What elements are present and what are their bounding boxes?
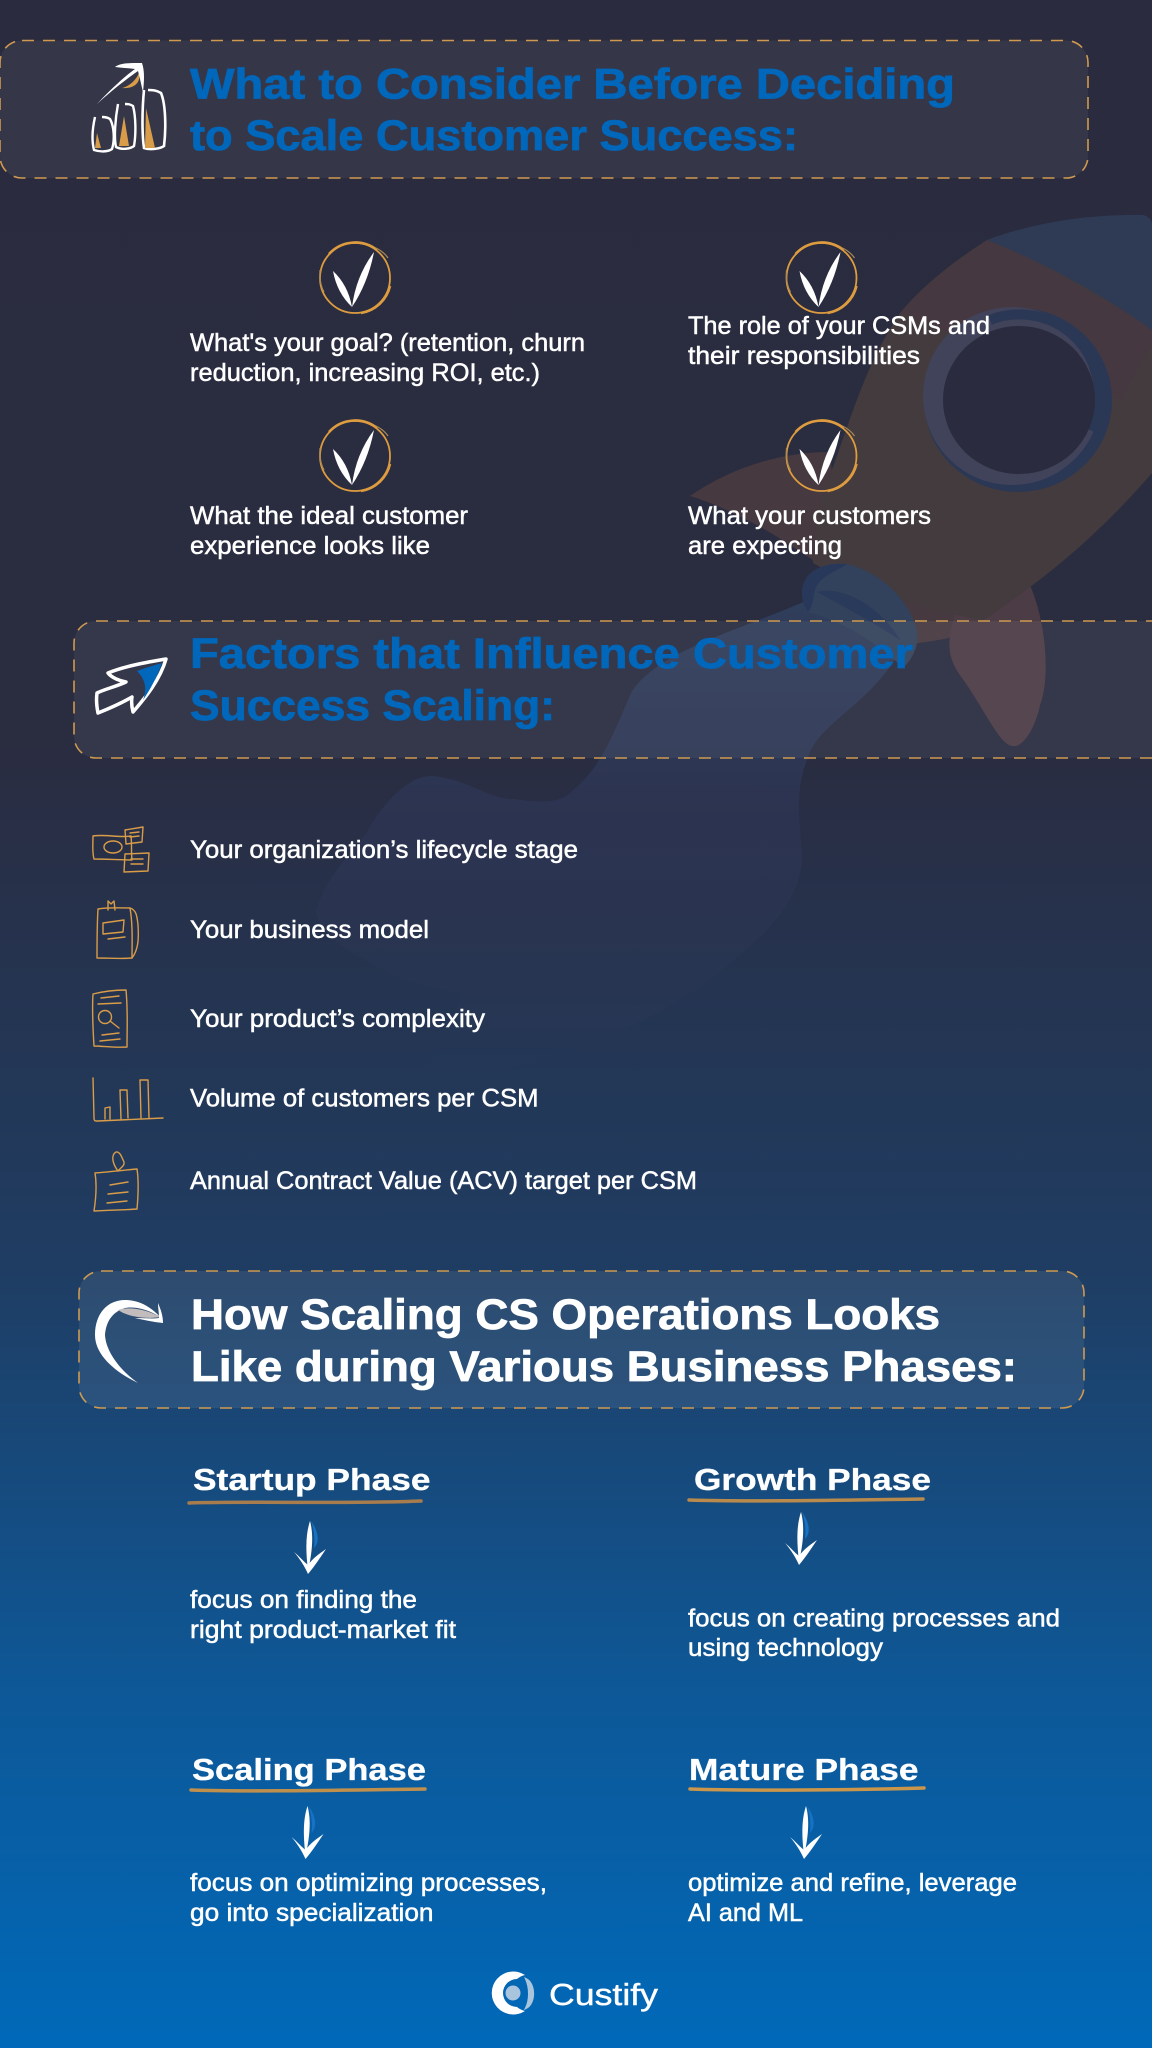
icon: check (786, 242, 856, 313)
rocket smoke trail (316, 600, 904, 1086)
heading: Success Scaling: (190, 682, 555, 730)
description (190, 1869, 547, 1927)
rocket right fin (949, 585, 1046, 746)
underline (191, 1789, 425, 1791)
text: goal: What's your goal? (retention, churn (190, 329, 585, 357)
description: focus on optimizing processes, (190, 1869, 547, 1897)
text: role (688, 312, 990, 370)
factor: business model (97, 901, 429, 958)
underline (689, 1499, 923, 1501)
panel: what to consider (0, 40, 1088, 178)
text: goal (190, 329, 585, 387)
text: customers expecting: are expecting (688, 532, 842, 560)
rocket illustration (316, 215, 1152, 1086)
rocket window (923, 307, 1112, 492)
panel: factors (74, 621, 1152, 758)
description: using technology (688, 1634, 884, 1662)
logo: Custify (492, 1972, 659, 2015)
rocket nose (987, 215, 1152, 330)
icon: growth bars with arrow (93, 63, 165, 151)
factor: ACV (94, 1152, 697, 1211)
phase: growth (688, 1462, 1060, 1662)
panel: scaling phases (79, 1271, 1084, 1408)
panel box (79, 1271, 1084, 1408)
underline (690, 1788, 924, 1790)
heading (190, 60, 955, 160)
icon: curved arrow (95, 1300, 163, 1383)
description: optimize and refine, leverage (688, 1869, 1017, 1897)
heading: Factors that Influence Customer (190, 630, 913, 678)
icon: paper plane (97, 659, 166, 713)
rocket left fin (690, 452, 985, 645)
phase: mature (688, 1752, 1017, 1927)
rocket red band (900, 240, 1152, 400)
icon: check (320, 242, 390, 313)
icon: check (786, 420, 856, 491)
underline (189, 1501, 421, 1503)
factor: product complexity (93, 990, 486, 1047)
factor: product complexity: Your product’s complexity (190, 1005, 486, 1033)
text: goal: reduction, increasing ROI, etc.) (190, 359, 540, 387)
icon: bar chart (93, 1078, 163, 1121)
text: ideal experience: What the ideal customer (190, 502, 468, 530)
checklist: considerations (190, 242, 990, 560)
heading (191, 1291, 1017, 1391)
heading (190, 630, 913, 730)
rocket body (813, 219, 1152, 620)
icon: cards (93, 827, 149, 872)
phase: startup (189, 1462, 456, 1644)
description (688, 1869, 1017, 1927)
description (688, 1604, 1060, 1662)
icon: document search (93, 990, 127, 1047)
text: ideal experience (190, 502, 468, 560)
description (190, 1586, 456, 1644)
arrow (785, 1512, 817, 1565)
heading: What to Consider Before Deciding (190, 60, 955, 108)
heading: Like during Various Business Phases: (191, 1343, 1017, 1391)
text: customers expecting: What your customers (688, 502, 931, 530)
factor: business model: Your business model (190, 916, 429, 944)
panel box (74, 621, 1152, 758)
arrow (294, 1521, 326, 1574)
phase heading: Startup Phase (193, 1462, 430, 1497)
text: customers expecting (688, 502, 931, 560)
rocket nozzle (802, 564, 918, 668)
heading: to Scale Customer Success: (190, 112, 798, 160)
factor: ACV: Annual Contract Value (ACV) target per CSM (190, 1167, 697, 1195)
text: ideal experience: experience looks like (190, 532, 430, 560)
text: role: The role of your CSMs and (688, 312, 990, 340)
heading: How Scaling CS Operations Looks (191, 1291, 940, 1339)
factor: volume: Volume of customers per CSM (190, 1084, 538, 1112)
description: AI and ML (688, 1899, 803, 1927)
icon: check (320, 420, 390, 491)
icon: pinned note (94, 1152, 138, 1211)
phase: scaling (190, 1752, 547, 1927)
description: go into specialization (190, 1899, 434, 1927)
description: focus on creating processes and (688, 1604, 1060, 1632)
phase heading: Growth Phase (694, 1462, 931, 1497)
text: role: their responsibilities (688, 342, 920, 370)
phase heading: Mature Phase (689, 1752, 918, 1787)
list: factors (93, 827, 697, 1211)
factor: lifecycle (93, 827, 578, 872)
factor: lifecycle: Your organization’s lifecycle stage (190, 836, 578, 864)
factor: volume (93, 1078, 538, 1121)
arrow (292, 1806, 324, 1859)
arrow (790, 1806, 822, 1859)
icon: book (97, 901, 138, 958)
panel box (0, 40, 1088, 178)
logo mark (492, 1972, 533, 2015)
logo: Custify: Custify (549, 1977, 659, 2012)
phase heading: Scaling Phase (192, 1752, 426, 1787)
description: focus on finding the (190, 1586, 417, 1614)
description: right product-market fit (190, 1616, 456, 1644)
